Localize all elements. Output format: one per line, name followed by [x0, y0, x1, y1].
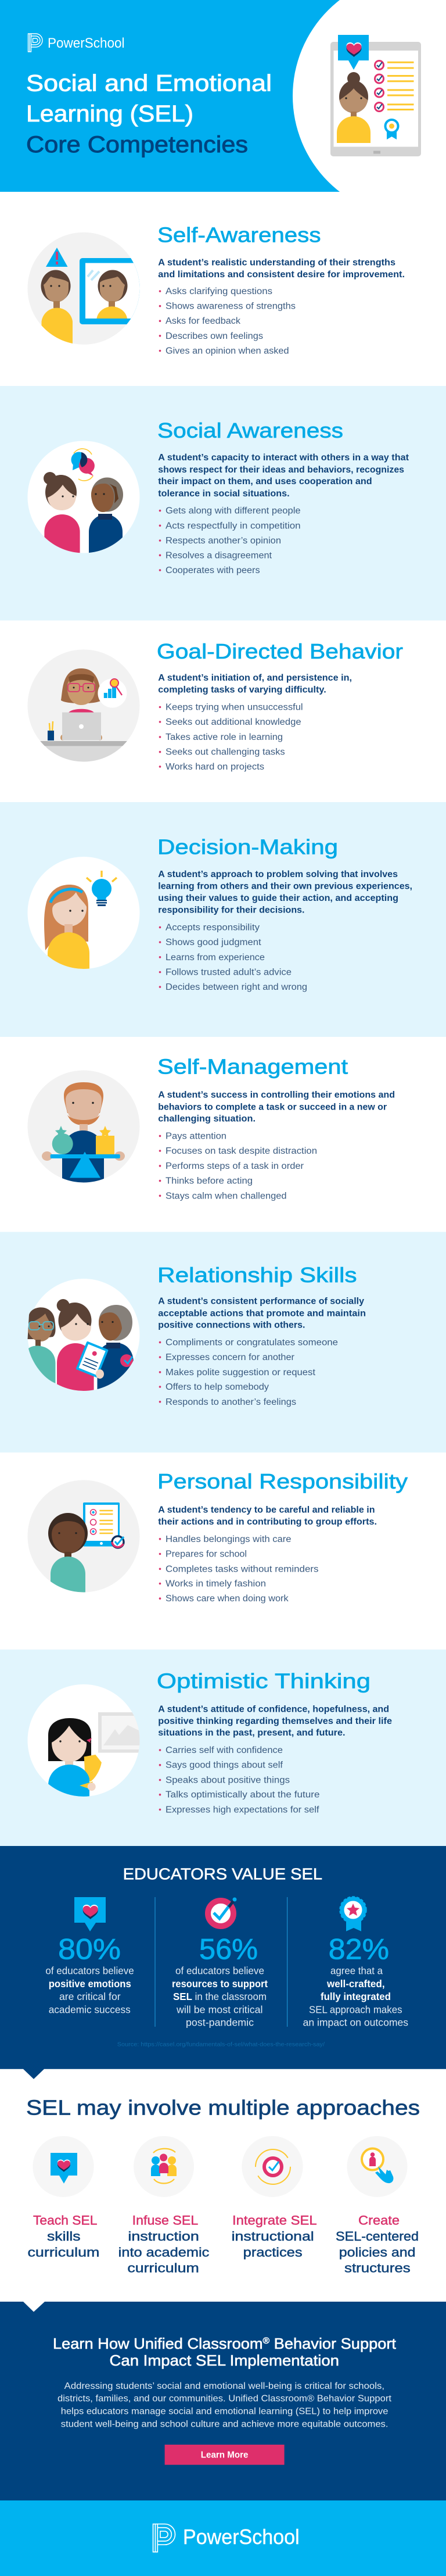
bullet list: Cooperates with peers: [166, 566, 260, 575]
approach: integrate: [232, 2136, 317, 2259]
panel: Personal Responsibility: [28, 1473, 408, 1603]
approach: teach: [28, 2136, 99, 2259]
heading: Personal Responsibility: [157, 1469, 408, 1493]
definition text: [158, 1704, 392, 1738]
bullet list: Works hard on projects: [166, 762, 264, 772]
header panel: [0, 0, 446, 217]
bullet list: Stays calm when challenged: [166, 1191, 287, 1201]
heading: Can Impact SEL Implementation: [109, 2352, 339, 2369]
bullet list: Learns from experience: [166, 953, 265, 963]
title: Learning (SEL): [26, 101, 193, 127]
definition text: challenging situation.: [158, 1114, 256, 1124]
bullet list: Thinks before acting: [166, 1176, 253, 1186]
bullet list: Keeps trying when unsuccessful: [166, 702, 303, 713]
definition text: positive thinking regarding themselves and their life: [158, 1716, 392, 1726]
definition text: A student’s initiation of, and persistence in,: [158, 673, 352, 683]
stat: 80%: of educators believe: [45, 1965, 134, 1977]
bullet list: [159, 506, 301, 575]
definition text: learning from others and their own previous experiences,: [158, 882, 412, 892]
stat: 82%: fully integrated: [321, 1991, 391, 2002]
heading: [53, 2335, 397, 2369]
approach: teach: curriculum: [28, 2245, 99, 2259]
button: Learn More: [165, 2445, 285, 2465]
approach: create: [336, 2136, 419, 2275]
approach: infuse: Infuse SEL: [132, 2213, 198, 2227]
panel: call to action: [0, 2302, 446, 2500]
definition text: [158, 453, 409, 499]
stat: 80%: academic success: [49, 2003, 131, 2015]
approach: teach: skills: [47, 2229, 81, 2244]
heading: Self-Awareness: [157, 223, 321, 247]
definition text: behaviors to complete a task or succeed in a new or: [158, 1102, 387, 1112]
icon: student and mirror: [28, 232, 143, 349]
bullet list: Performs steps of a task in order: [166, 1161, 304, 1171]
stat: 82%: [303, 1897, 408, 2028]
icon: group with arrows: [151, 2149, 177, 2183]
approach: infuse: instruction: [128, 2229, 199, 2244]
bullet list: Seeks out challenging tasks: [166, 747, 285, 757]
icon: student with light bulb: [28, 857, 139, 971]
bullet list: Pays attention: [166, 1131, 226, 1141]
icon: check ring with arrows: [256, 2149, 290, 2184]
left student: [28, 1307, 56, 1383]
bullet list: Asks for feedback: [166, 316, 240, 326]
icon: hand selecting person: [362, 2148, 393, 2183]
logo: PowerSchool: [153, 2524, 300, 2552]
stat: 82%: an impact on outcomes: [303, 2017, 408, 2028]
icon: student balancing a scale: [28, 1071, 139, 1186]
bullet list: Responds to another’s feelings: [166, 1397, 296, 1407]
middle student: [57, 1299, 94, 1395]
definition text: positive connections with others.: [158, 1321, 305, 1330]
definition text: A student’s capacity to interact with others in a way that: [158, 453, 409, 463]
approach: integrate: instructional: [232, 2229, 314, 2244]
definition text: A student’s tendency to be careful and reliable in: [158, 1505, 375, 1515]
approach: teach: Teach SEL: [33, 2213, 98, 2227]
stat: 80%: are critical for: [59, 1991, 121, 2002]
panel: Optimistic Thinking: [0, 1650, 446, 1846]
bullet list: Compliments or congratulates someone: [166, 1337, 338, 1347]
definition text: their actions and in contributing to group efforts.: [158, 1517, 377, 1527]
definition text: responsibility for their decisions.: [158, 906, 304, 915]
definition text: acceptable actions that promote and maintain: [158, 1308, 366, 1318]
title: Core Competencies: [26, 132, 248, 158]
logo: PowerSchool: PowerSchool: [48, 35, 124, 51]
heading: Goal-Directed Behavior: [157, 639, 403, 663]
logo: PowerSchool: PowerSchool: [183, 2525, 300, 2549]
bullet list: Respects another’s opinion: [166, 536, 281, 546]
heading: Social Awareness: [157, 418, 343, 442]
bullet list: Describes own feelings: [166, 331, 263, 341]
panel: Self-Management: [28, 1058, 394, 1201]
stat: 80%: [45, 1897, 134, 2015]
bullet list: Carries self with confidence: [166, 1745, 283, 1755]
icon: heart speech bubble: [74, 1897, 106, 1931]
icon: check target: [208, 1897, 237, 1926]
body text: student well-being and school culture and achieve more equitable outcomes.: [61, 2420, 389, 2430]
icon: student with checklist tablet: [28, 1480, 139, 1595]
bullet list: [159, 287, 296, 356]
bullet list: Expresses high expectations for self: [166, 1805, 319, 1815]
definition text: A student’s attitude of confidence, hopefulness, and: [158, 1704, 389, 1714]
bullet list: [159, 1745, 319, 1815]
bullet list: Expresses concern for another: [166, 1353, 294, 1362]
bullet list: Takes active role in learning: [166, 732, 283, 742]
bullet list: Shows awareness of strengths: [166, 302, 296, 312]
title: [26, 71, 272, 158]
stat: 56%: post-pandemic: [186, 2017, 254, 2028]
icon: three people with tablet: [28, 1279, 139, 1395]
bullet list: Accepts responsibility: [166, 922, 260, 932]
bullet list: Decides between right and wrong: [166, 982, 307, 992]
definition text: shows respect for their ideas and behaviors, recognizes: [158, 465, 404, 475]
body text: districts, families, and our communities. Unified Classroom® Behavior Support: [57, 2394, 392, 2404]
approach: integrate: Integrate SEL: [232, 2213, 317, 2227]
bullet list: Acts respectfully in competition: [166, 521, 301, 531]
stat: 82%: SEL approach makes: [309, 2003, 402, 2015]
icon: tablet with student profile: [330, 35, 421, 156]
heading: Self-Management: [157, 1054, 348, 1078]
panel: Goal-Directed Behavior: [28, 643, 403, 772]
bullet list: Makes polite suggestion or request: [166, 1368, 316, 1378]
definition text: tolerance in social situations.: [158, 489, 290, 499]
approach: create: SEL-centered: [336, 2229, 419, 2244]
logo: PowerSchool: [28, 34, 124, 52]
bullet list: Resolves a disagreement: [166, 550, 272, 560]
bullet list: Prepares for school: [166, 1550, 247, 1559]
body text: helps educators manage social and emotional learning (SEL) to help improve: [61, 2407, 389, 2417]
stat: 80%: positive emotions: [49, 1978, 131, 1990]
icon: student with trophy: [28, 1684, 145, 1799]
bullet list: Shows care when doing work: [166, 1594, 289, 1604]
definition text: [158, 1297, 366, 1330]
bullet list: Completes tasks without reminders: [166, 1564, 319, 1574]
approach: integrate: practices: [243, 2245, 303, 2259]
stat: 82%: agree that a: [330, 1965, 383, 1977]
heading: Learn How Unified Classroom: [53, 2335, 253, 2352]
bullet list: [159, 1131, 317, 1201]
panel: Educators Value SEL: [0, 1846, 446, 2079]
approach: create: Create: [358, 2213, 400, 2227]
panel: Decision-Making: [0, 802, 446, 1037]
definition text: using their values to guide their action, and accepting: [158, 893, 398, 903]
bullet list: [159, 922, 307, 992]
source note: Source: https://casel.org/fundamentals-of-sel/what-does-the-research-say/: [117, 2041, 325, 2048]
approach: create: structures: [344, 2260, 411, 2275]
bullet list: [159, 1534, 319, 1604]
definition text: [158, 673, 352, 695]
definition text: A student’s success in controlling their emotions and: [158, 1090, 395, 1100]
panel: Social Awareness: [0, 386, 446, 621]
definition text: their impact on them, and uses cooperation and: [158, 477, 372, 486]
icon: student at laptop: [28, 650, 139, 763]
panel: SEL approaches: [26, 2095, 420, 2275]
definition text: and limitations and consistent desire for improvement.: [158, 270, 405, 280]
heading: Decision-Making: [157, 835, 338, 859]
bullet list: Shows good judgment: [166, 938, 261, 947]
heading: SEL may involve multiple approaches: [26, 2095, 420, 2119]
heading: Relationship Skills: [157, 1263, 357, 1287]
definition text: [158, 1505, 377, 1527]
title: Social and Emotional: [26, 71, 272, 96]
definition text: A student’s consistent performance of socially: [158, 1297, 364, 1307]
heading: Optimistic Thinking: [157, 1669, 371, 1693]
panel: Relationship Skills: [0, 1232, 446, 1452]
bullet list: Says good things about self: [166, 1761, 283, 1770]
bullet list: Gets along with different people: [166, 506, 301, 516]
tablet: [75, 1341, 109, 1378]
stat: 82%: 82%: [329, 1933, 389, 1966]
bullet list: Works in timely fashion: [166, 1579, 266, 1589]
definition text: A student’s realistic understanding of their strengths: [158, 258, 395, 268]
bullet list: Talks optimistically about the future: [166, 1790, 319, 1800]
stat: 56%: of educators believe: [175, 1965, 264, 1977]
button: Learn More: Learn More: [201, 2450, 249, 2460]
panel: Self-Awareness: [28, 227, 404, 356]
stat: 56%: [172, 1897, 268, 2028]
stat: 56%: SEL in the classroom: [173, 1991, 267, 2002]
definition text: situations in the past, present, and future.: [158, 1728, 345, 1738]
bullet list: [159, 1337, 338, 1407]
stat: 56%: 56%: [199, 1933, 258, 1966]
body text: Addressing students’ social and emotional well-being is critical for schools,: [64, 2381, 384, 2391]
approach: infuse: [118, 2136, 209, 2275]
definition text: [158, 1090, 395, 1124]
body text: [57, 2381, 392, 2430]
bullet list: Focuses on task despite distraction: [166, 1146, 317, 1156]
icon: two students talking: [28, 441, 139, 558]
approach: infuse: curriculum: [127, 2260, 199, 2275]
stat: 80%: 80%: [58, 1933, 121, 1966]
definition text: [158, 258, 405, 280]
definition text: A student’s approach to problem solving that involves: [158, 870, 398, 879]
approach: create: policies and: [339, 2245, 416, 2259]
heading: Behavior Support: [269, 2335, 397, 2352]
definition text: completing tasks of varying difficulty.: [158, 685, 326, 695]
approach: infuse: into academic: [118, 2245, 209, 2259]
bullet list: Asks clarifying questions: [166, 287, 272, 296]
bullet list: Seeks out additional knowledge: [166, 717, 301, 727]
stat: 82%: well-crafted,: [326, 1978, 385, 1990]
bullet list: Follows trusted adult’s advice: [166, 967, 292, 978]
stat: 56%: will be most critical: [176, 2003, 262, 2015]
bullet list: Handles belongings with care: [166, 1534, 292, 1544]
bullet list: Gives an opinion when asked: [166, 346, 289, 356]
bullet list: [159, 702, 303, 772]
heading: EDUCATORS VALUE SEL: [123, 1865, 322, 1883]
icon: award ribbon: [340, 1897, 366, 1931]
bullet list: Speaks about positive things: [166, 1775, 290, 1785]
heading: ®: [263, 2336, 269, 2346]
right student: [98, 1305, 134, 1395]
bullet list: Offers to help somebody: [166, 1382, 269, 1392]
stat: 56%: resources to support: [172, 1978, 268, 1990]
icon: heart bubble: [51, 2153, 77, 2184]
definition text: [158, 870, 412, 915]
panel: footer: [0, 2500, 446, 2576]
